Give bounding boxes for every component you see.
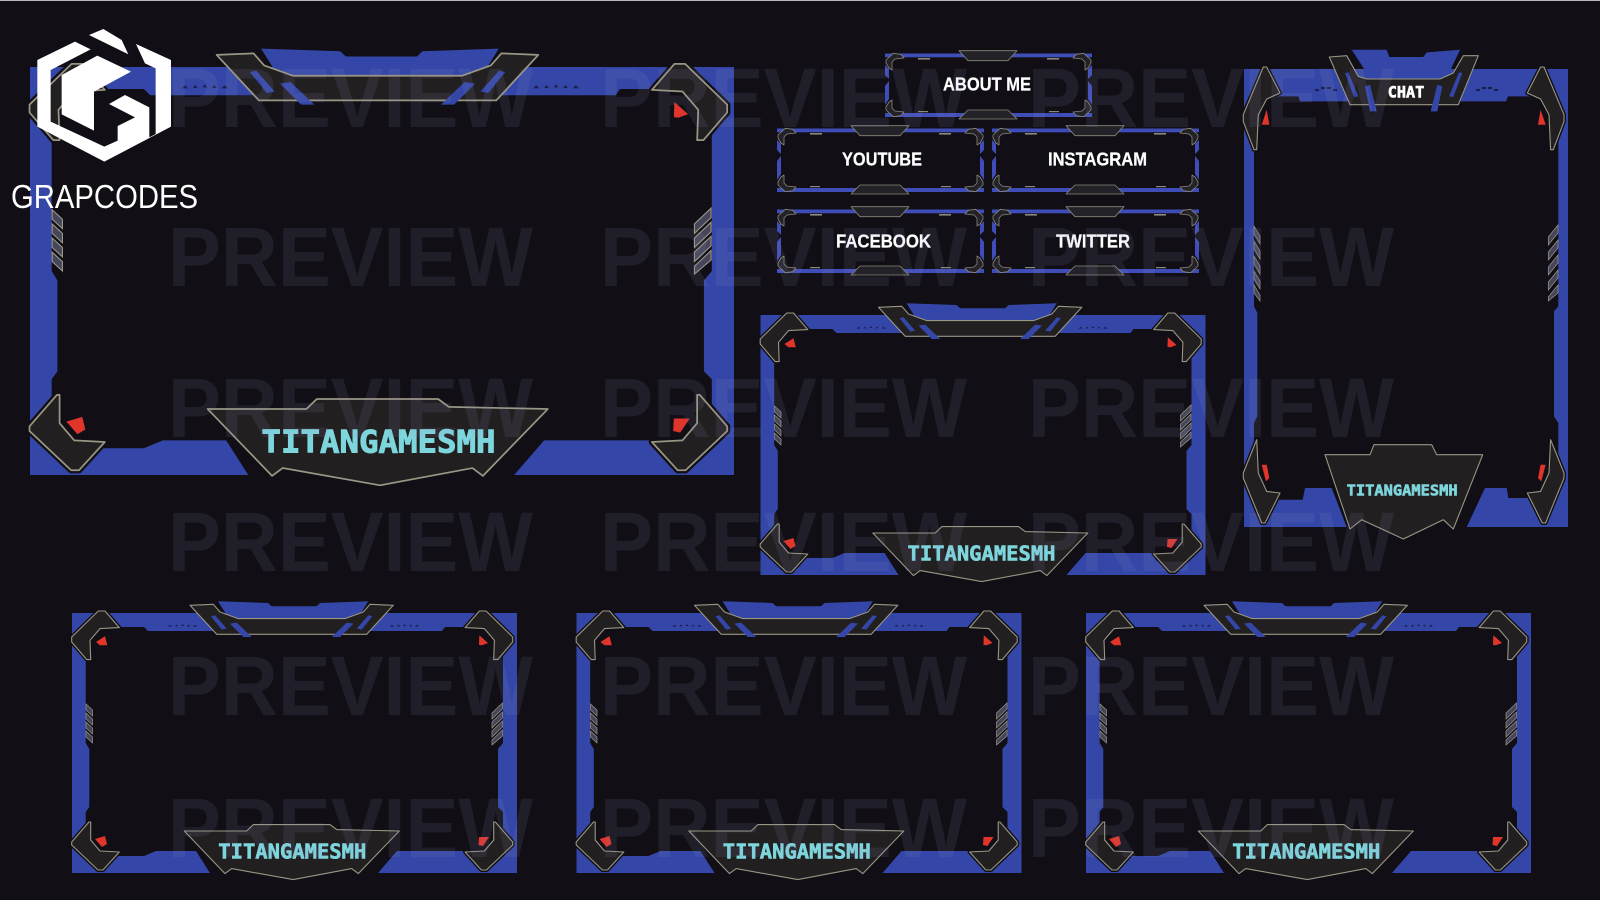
watermark grid: PREVIEW xyxy=(168,639,534,733)
right frame corners xyxy=(1086,611,1527,870)
name: right frame: TITANGAMESMH xyxy=(1232,840,1380,864)
watermark grid: PREVIEW xyxy=(600,639,968,733)
watermark grid: PREVIEW xyxy=(168,210,534,304)
panel: bottom frame left xyxy=(72,601,517,880)
panel: button twitter xyxy=(992,207,1199,275)
top tab centre xyxy=(694,604,898,634)
panel: bottom frame centre xyxy=(576,601,1022,880)
watermark grid: PREVIEW xyxy=(168,495,534,589)
watermark grid: PREVIEW xyxy=(1028,361,1395,455)
panel: middle frame xyxy=(760,303,1206,582)
watermark grid: PREVIEW xyxy=(600,51,968,145)
name: main frame: TITANGAMESMH xyxy=(261,424,496,460)
centre frame corners xyxy=(576,611,1017,870)
watermark grid: PREVIEW xyxy=(1028,51,1395,145)
watermark grid: PREVIEW xyxy=(168,781,534,875)
label: instagram: INSTAGRAM xyxy=(1048,150,1147,170)
label: about me: ABOUT ME xyxy=(943,74,1031,94)
wordmark: GRAPCODES xyxy=(11,178,198,215)
watermark grid: PREVIEW xyxy=(1028,781,1395,875)
corner brackets xyxy=(30,64,727,470)
label: facebook: FACEBOOK xyxy=(836,232,931,252)
top edge line xyxy=(0,0,1600,1)
logo: grapcodes xyxy=(11,29,198,215)
icon: hexagon G xyxy=(37,29,171,162)
watermark grid: PREVIEW xyxy=(168,361,534,455)
label: chat: CHAT xyxy=(1388,82,1424,101)
name: centre frame: TITANGAMESMH xyxy=(723,840,871,864)
panel: button about me xyxy=(885,51,1092,119)
panel: main stream frame xyxy=(30,49,734,485)
watermark grid: PREVIEW xyxy=(168,51,534,145)
name: left frame: TITANGAMESMH xyxy=(218,840,366,864)
watermark grid: PREVIEW xyxy=(600,361,968,455)
watermark grid: PREVIEW xyxy=(600,781,968,875)
name: middle frame: TITANGAMESMH xyxy=(908,542,1056,566)
middle frame corners xyxy=(760,313,1201,572)
chat corner brackets xyxy=(1243,67,1564,523)
top tab of middle frame xyxy=(878,306,1082,336)
watermark grid: PREVIEW xyxy=(1028,210,1395,304)
label: twitter: TWITTER xyxy=(1056,232,1130,252)
panel: button facebook xyxy=(777,207,984,275)
panel: button youtube xyxy=(777,126,984,194)
top tab of main frame xyxy=(217,53,538,100)
watermark grid xyxy=(168,51,1395,875)
panel: chat frame xyxy=(1243,50,1568,539)
left frame corners xyxy=(72,611,513,870)
watermark grid: PREVIEW xyxy=(1028,495,1395,589)
top tab right xyxy=(1204,604,1407,634)
label: youtube: YOUTUBE xyxy=(842,150,922,170)
name: chat frame: TITANGAMESMH xyxy=(1347,482,1458,500)
watermark grid: PREVIEW xyxy=(600,495,968,589)
panel: button instagram xyxy=(992,126,1199,194)
watermark grid: PREVIEW xyxy=(1028,639,1395,733)
panel: bottom frame right xyxy=(1086,601,1531,880)
watermark grid: PREVIEW xyxy=(600,210,968,304)
chat tab xyxy=(1329,56,1478,105)
top tab left xyxy=(190,604,393,634)
